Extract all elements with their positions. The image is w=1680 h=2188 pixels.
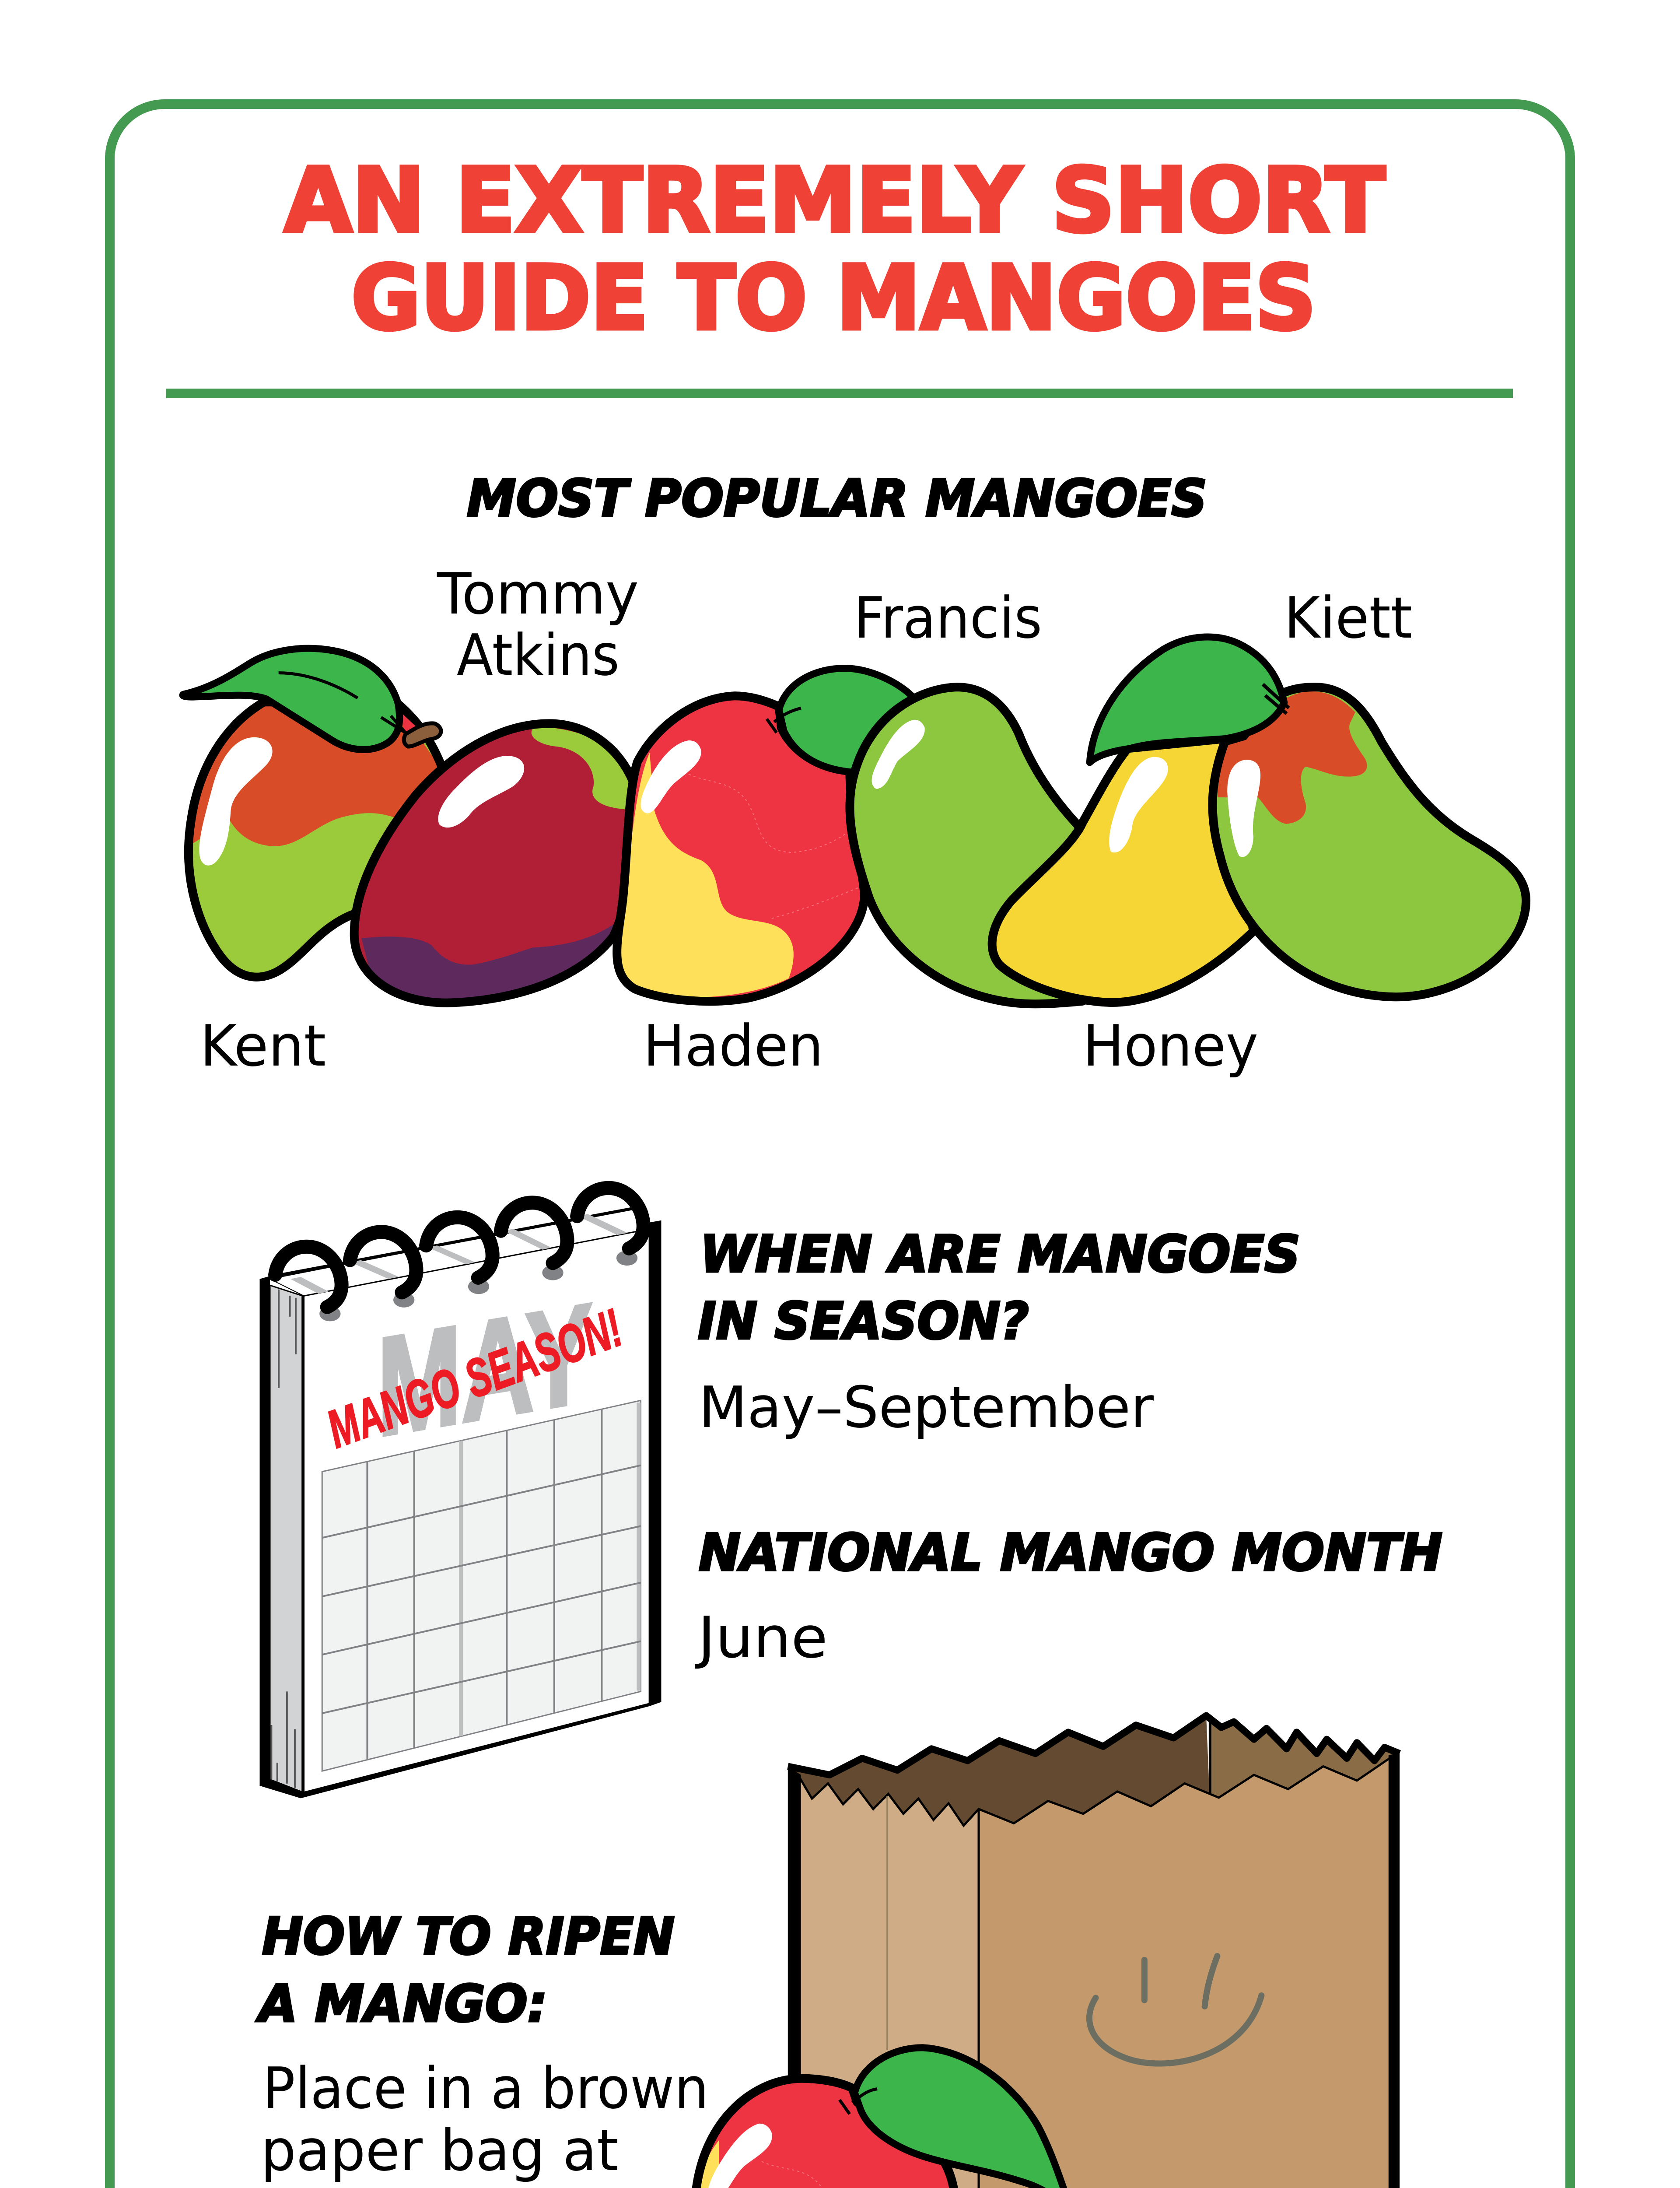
text: mango season bbox=[698, 1225, 1300, 1441]
text: mango season: WHEN ARE MANGOES bbox=[700, 1225, 1300, 1284]
text: how to ripen: A MANGO: bbox=[256, 1974, 547, 2034]
mango group: Francis, Honey, Kiett bbox=[850, 637, 1526, 1004]
paper bag bbox=[788, 1715, 1400, 2188]
mango labels: Atkins bbox=[457, 622, 620, 688]
mango labels: Kiett bbox=[1284, 585, 1412, 651]
mango labels: Haden bbox=[643, 1013, 823, 1079]
title: AN EXTREMELY SHORT bbox=[284, 149, 1385, 252]
title divider bbox=[166, 389, 1513, 398]
mango: Haden bbox=[617, 668, 913, 1001]
text: how to ripen bbox=[256, 1907, 709, 2188]
calendar month: MAY bbox=[377, 1274, 592, 1466]
text: national mango month: June bbox=[695, 1604, 828, 1671]
mango: front bbox=[681, 2048, 1073, 2188]
text: mango season: IN SEASON? bbox=[698, 1292, 1029, 1351]
calendar bbox=[260, 1188, 661, 1798]
mango: Tommy Atkins bbox=[354, 723, 635, 1003]
mango labels: Honey bbox=[1083, 1013, 1258, 1079]
heading: most popular mangoes: MOST POPULAR MANGOES bbox=[467, 469, 1207, 528]
paper bag and mango bbox=[681, 1715, 1400, 2188]
mango labels bbox=[200, 561, 1412, 1079]
mango group: Kent, Tommy Atkins, Haden bbox=[183, 649, 913, 1003]
mango: Kent bbox=[183, 649, 444, 977]
text: how to ripen: Place in a brown bbox=[262, 2055, 709, 2121]
leaf: Honey mango bbox=[1090, 637, 1289, 762]
mango season stamp: MANGO SEASON! bbox=[319, 1298, 630, 1459]
mango labels: Tommy bbox=[437, 561, 639, 627]
title bbox=[284, 149, 1385, 350]
text: how to ripen: HOW TO RIPEN bbox=[262, 1907, 675, 1966]
text: mango season: May–September bbox=[699, 1374, 1154, 1441]
title: GUIDE TO MANGOES bbox=[351, 246, 1316, 350]
mango: Honey bbox=[992, 739, 1253, 1003]
smiley face bbox=[1089, 1956, 1261, 2064]
mango: Kiett bbox=[1213, 687, 1526, 997]
text: how to ripen: paper bag at bbox=[261, 2117, 619, 2184]
text: national mango month: NATIONAL MANGO MONTH bbox=[699, 1523, 1442, 1582]
text: national mango month bbox=[695, 1523, 1442, 1671]
mango labels: Kent bbox=[200, 1013, 326, 1079]
mango labels: Francis bbox=[854, 585, 1042, 651]
mango: Francis bbox=[850, 687, 1116, 1004]
calendar rings bbox=[275, 1188, 644, 1321]
